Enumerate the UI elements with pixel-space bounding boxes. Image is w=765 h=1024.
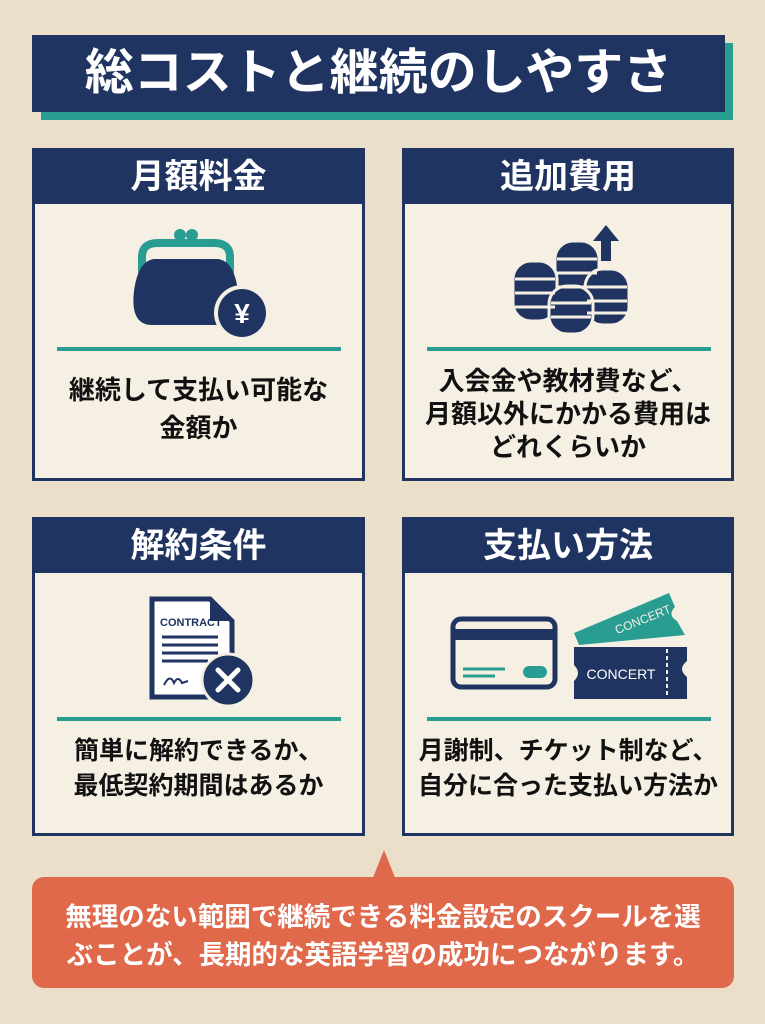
panel: monthly fee [32,148,365,481]
heading: 追加費用 [500,158,636,196]
heading [405,520,731,573]
divider [57,717,341,721]
heading: 解約条件 [130,527,266,565]
icon: purse with yen: ¥ [234,298,250,329]
text block: 月謝制、チケット制など、 [419,737,717,765]
text block: 継続して支払い可能な [69,375,328,405]
divider [427,717,711,721]
text block [69,375,328,443]
divider [427,347,711,351]
text block [418,737,718,800]
text block: 月額以外にかかる費用は [425,399,711,429]
panel: payment method [402,517,734,836]
icon: card and tickets: CONCERT [613,602,674,637]
text block: 簡単に解約できるか、 [74,737,323,765]
text block: 最低契約期間はあるか [73,772,324,800]
heading: 支払い方法 [483,527,653,565]
icon: card and tickets [450,593,687,699]
title: 総コストと継続のしやすさ [85,46,672,100]
icon: card and tickets: CONCERT [587,666,656,682]
callout: ぶことが、長期的な英語学習の成功につながります。 [67,940,699,970]
panel: additional costs [402,148,734,481]
title [32,35,733,120]
text block: 自分に合った支払い方法か [418,772,718,800]
text block [73,737,324,800]
icon: purse with yen [133,229,266,337]
text block: どれくらいか [490,432,646,462]
text block: 入会金や教材費など、 [439,366,697,396]
heading: 月額料金 [130,158,266,196]
heading [35,151,362,204]
callout: 無理のない範囲で継続できる料金設定のスクールを選 [65,902,701,932]
text block [425,366,711,462]
divider [57,347,341,351]
heading [35,520,362,573]
icon: coins with arrow [514,225,628,332]
callout [32,850,734,988]
heading [405,151,731,204]
icon: contract: CONTRACT [160,617,222,629]
text block: 金額か [159,413,238,443]
icon: contract [150,596,252,704]
panel: cancellation [32,517,365,836]
